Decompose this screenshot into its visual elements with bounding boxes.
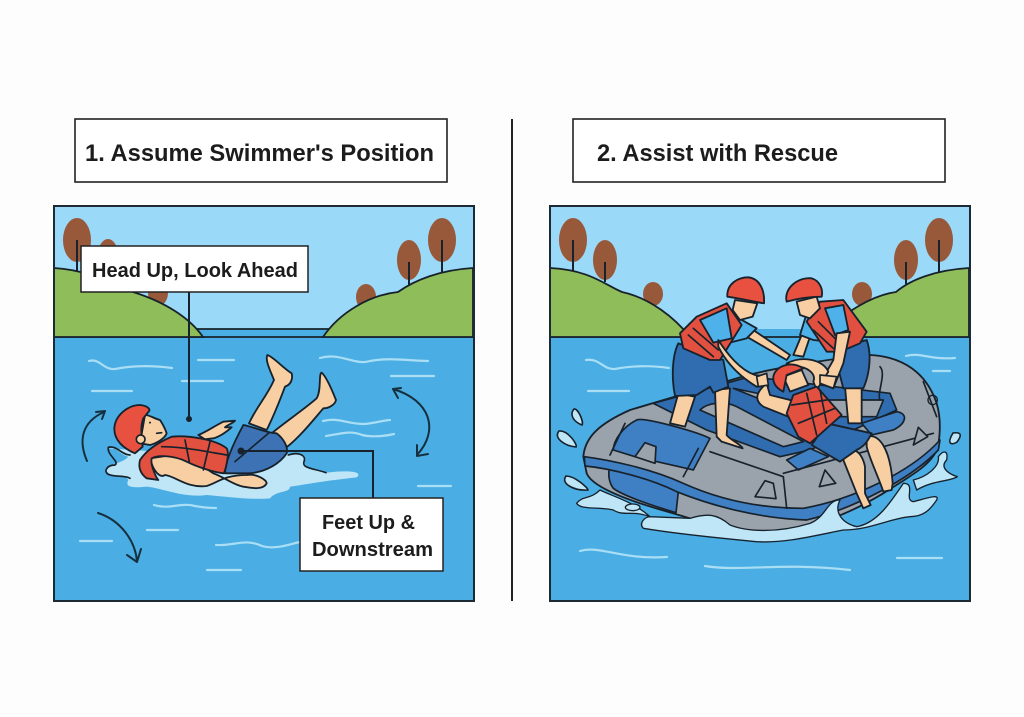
panel: swimmer's position xyxy=(54,206,474,601)
heading 1: 1. Assume Swimmer's Position xyxy=(85,140,434,167)
swimmer xyxy=(106,355,358,499)
raft blue floor and panels xyxy=(653,377,897,457)
water ripples xyxy=(580,355,955,570)
river background xyxy=(550,329,970,601)
callout: feet up and downstream: Feet Up & xyxy=(322,512,415,534)
hills xyxy=(54,268,473,337)
hills xyxy=(550,268,969,337)
life vest xyxy=(139,436,228,480)
trees xyxy=(63,218,456,310)
river background xyxy=(54,329,474,601)
heading 1 xyxy=(75,119,447,182)
trees xyxy=(559,218,953,306)
panel: assist with rescue xyxy=(550,206,970,601)
callout: head up, look ahead: Head Up, Look Ahead xyxy=(92,260,298,282)
helmet xyxy=(114,405,149,453)
arrows xyxy=(83,388,429,562)
torso and lower arm xyxy=(150,453,267,488)
callout: feet up and downstream xyxy=(238,448,443,571)
rescued swimmer xyxy=(757,359,893,508)
shorts xyxy=(225,425,287,473)
rescuer left xyxy=(670,277,790,448)
rescuer right xyxy=(786,278,870,423)
heading 2: 2. Assist with Rescue xyxy=(597,140,838,167)
water foam xyxy=(577,483,937,542)
splash drops xyxy=(557,409,960,490)
divider xyxy=(511,119,513,601)
raft handles xyxy=(635,427,928,499)
water ripples xyxy=(80,356,451,570)
legs xyxy=(249,355,292,430)
rope coil xyxy=(923,382,937,417)
foam xyxy=(106,447,358,499)
callout: head up, look ahead xyxy=(81,246,308,422)
raised arm xyxy=(198,421,235,439)
callout: feet up and downstream: Downstream xyxy=(312,539,433,561)
heading 2 xyxy=(573,119,945,182)
raft group xyxy=(577,277,957,542)
head xyxy=(140,415,167,445)
raft hull xyxy=(583,355,940,532)
